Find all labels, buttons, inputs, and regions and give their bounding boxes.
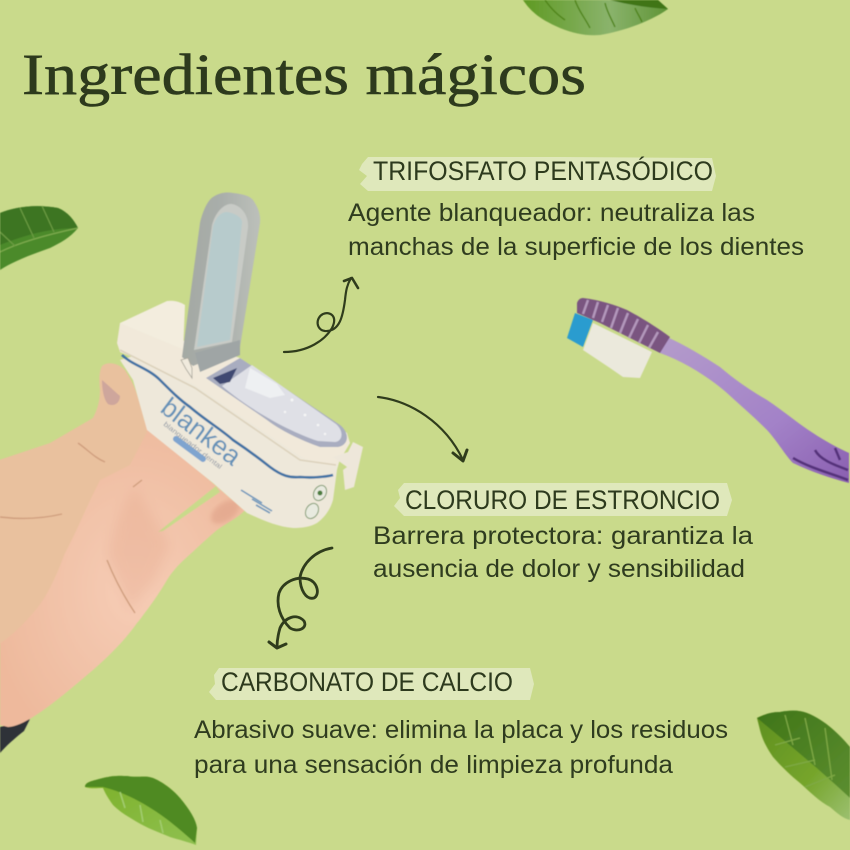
rim shading [120, 350, 336, 465]
bristles white [583, 323, 652, 378]
heading: cloruro: CLORURO DE ESTRONCIO [405, 485, 720, 515]
highlight strip: carbonato [209, 668, 534, 700]
powder grains [284, 398, 326, 435]
bristles blue [567, 313, 593, 347]
lid mirror [197, 212, 242, 347]
sleeve [0, 719, 30, 753]
head [577, 298, 670, 353]
heading: carbonato: CARBONATO DE CALCIO [221, 667, 513, 697]
badge [176, 439, 203, 459]
hinge [181, 358, 192, 378]
lid foot [195, 340, 240, 372]
arrow: to carbonato [269, 548, 332, 648]
finger gap [158, 486, 220, 532]
blue wave line [122, 355, 333, 477]
title: Ingredientes mágicos [22, 42, 586, 107]
well rim [206, 358, 347, 447]
cap [120, 301, 185, 353]
body: trifosfato: Agente blanqueador: neutraliza las [348, 199, 755, 227]
leaf: bottom left [85, 776, 197, 845]
powder mound [245, 368, 285, 398]
leaf: top [523, 0, 668, 35]
body: cloruro: Barrera protectora: garantiza la [373, 522, 753, 550]
creases [0, 443, 142, 613]
top rim [117, 323, 350, 465]
logo subtitle: blanqueador dental [162, 421, 223, 471]
flip lid [182, 192, 260, 366]
box side wall [120, 340, 347, 528]
highlight strip: cloruro [394, 483, 732, 516]
body: cloruro line 2: ausencia de dolor y sensibilidad [373, 555, 745, 583]
arrow: to cloruro [378, 397, 467, 461]
hand holding product [0, 363, 245, 753]
small print [241, 490, 272, 513]
lid inner frame [194, 204, 248, 350]
powder compartment [222, 365, 342, 442]
arrow: to trifosfato [284, 278, 358, 352]
heading: trifosfato: TRIFOSFATO PENTASÓDICO [373, 155, 713, 186]
grip [793, 448, 848, 480]
seals [303, 483, 329, 521]
product: blankea box [117, 192, 363, 528]
palm and fingers [0, 420, 245, 727]
head ridges [583, 300, 658, 348]
dark corner [213, 368, 237, 384]
highlight strip: trifosfato [359, 157, 716, 191]
body: carbonato: Abrasivo suave: elimina la placa y los residuos [194, 716, 728, 744]
body: carbonato line 2: para una sensación de limpieza profunda [194, 751, 673, 779]
logo: blankea [155, 392, 248, 472]
thumbnail [102, 380, 120, 405]
handle [660, 336, 849, 483]
leaf: bottom right [757, 711, 850, 820]
leaf: left [0, 206, 78, 270]
body: trifosfato line 2: manchas de la superficie de los dientes [348, 233, 804, 261]
thumb base [0, 363, 147, 650]
palm shading [108, 488, 170, 610]
toothbrush [567, 298, 849, 483]
finger shading [207, 495, 243, 529]
side clip [333, 442, 363, 490]
